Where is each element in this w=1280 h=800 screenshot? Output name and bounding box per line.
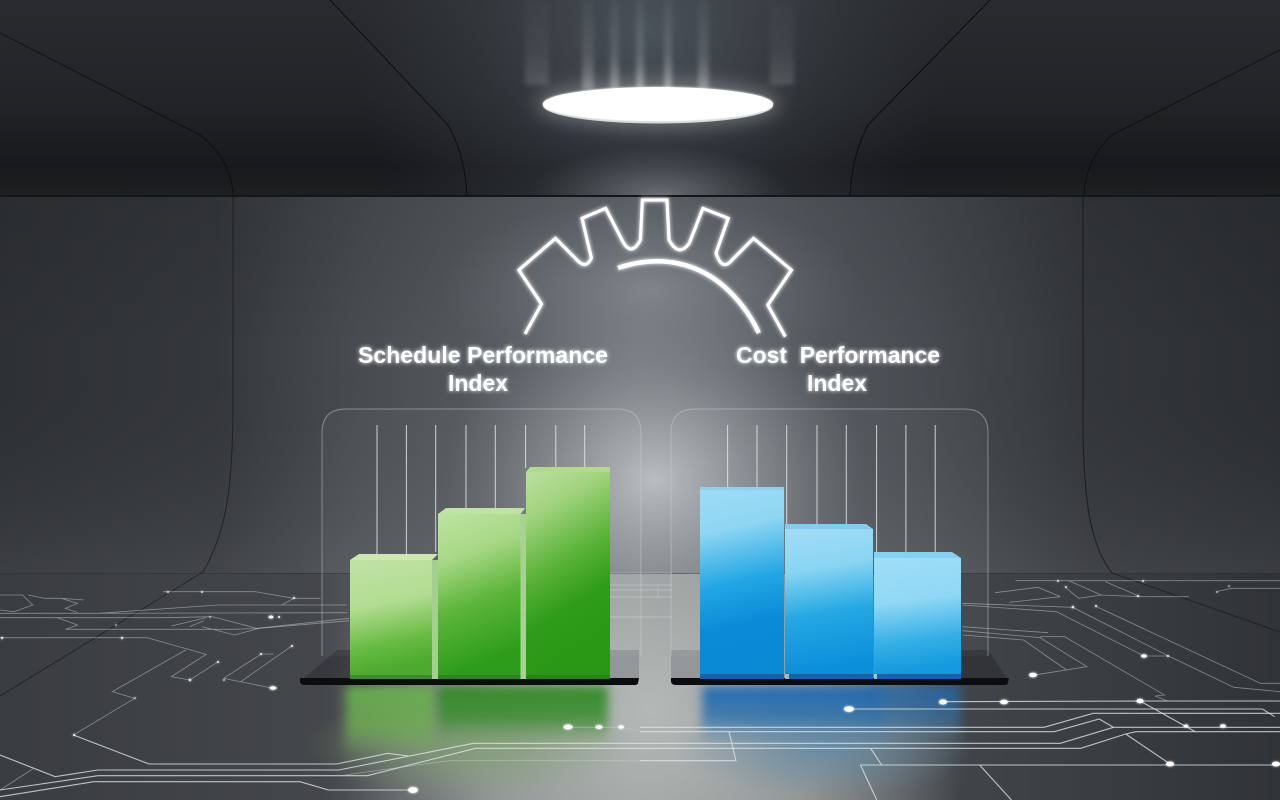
bar 1 xyxy=(700,487,784,679)
floor reflection: blue bars xyxy=(675,686,975,797)
heading: Cost Performance Index xyxy=(736,342,940,396)
heading: Schedule Performance Index xyxy=(358,342,608,396)
glass frame xyxy=(671,409,988,656)
ceiling xyxy=(0,0,1280,246)
gear outline xyxy=(519,200,791,337)
floor reflection: green bars xyxy=(305,686,635,797)
circuit traces: centre floor xyxy=(610,573,672,617)
heading: Cost Performance Index: Index xyxy=(807,370,867,396)
hanging lines xyxy=(377,425,585,556)
bar 2 xyxy=(785,524,873,679)
circuit traces: left floor xyxy=(0,592,640,797)
ceiling lamp light beams xyxy=(525,0,794,90)
heading: Cost Performance Index: Cost Performance xyxy=(736,342,940,368)
bar 2 xyxy=(432,508,525,679)
back wall xyxy=(0,196,1280,670)
base plate xyxy=(300,650,639,685)
floor xyxy=(0,573,1280,800)
bar 1 xyxy=(350,554,438,679)
heading: Schedule Performance Index: Index xyxy=(448,370,508,396)
circuit nodes xyxy=(1,580,1280,793)
glass frame xyxy=(322,409,641,656)
panel: schedule performance chart xyxy=(300,409,641,685)
base plate xyxy=(671,650,1009,685)
heading: Schedule Performance Index: Schedule Performance xyxy=(358,342,608,368)
bar 3 xyxy=(874,552,961,679)
hanging lines xyxy=(728,425,935,555)
bar 3 xyxy=(520,467,610,679)
ceiling lamp xyxy=(536,82,780,126)
panel: cost performance chart xyxy=(671,409,1009,685)
circuit traces: right floor xyxy=(640,581,1280,800)
